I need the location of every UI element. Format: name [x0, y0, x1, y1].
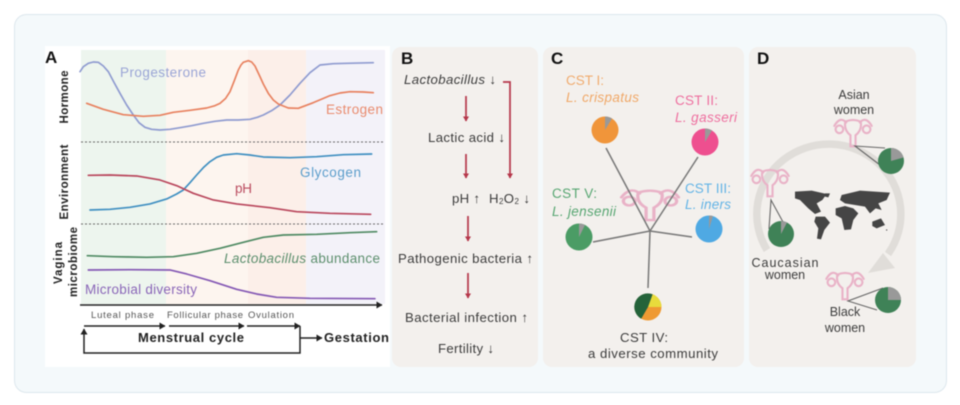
curve labels: Glycogen [300, 165, 361, 180]
microbiome curves [87, 232, 377, 299]
panel D: population differences [749, 47, 916, 367]
Caucasian women: women [764, 268, 805, 282]
chain text: 2 [514, 197, 519, 206]
CST III [685, 181, 731, 242]
Black women: Black [830, 305, 861, 319]
icon: uterus [621, 190, 679, 220]
chain text: 2 [499, 197, 504, 206]
CST IV: a diverse community [588, 346, 718, 361]
CST II [675, 93, 738, 156]
chain text: Lactic acid ↓ [428, 130, 505, 145]
CST V [552, 186, 617, 250]
CST I: L. crispatus [566, 90, 639, 105]
CST IV [588, 293, 718, 361]
phase labels: Luteal phase [91, 310, 154, 321]
CST III: CST III: [685, 181, 731, 196]
CST V: CST V: [552, 186, 597, 201]
curve labels: Microbial diversity [85, 282, 197, 297]
Black women: women [824, 321, 865, 335]
row label: Environment: Environment [59, 144, 71, 220]
hormone curves [80, 61, 373, 214]
curve labels: Lactobacillus abundance [224, 251, 380, 266]
row label: Hormone: Hormone [59, 70, 71, 124]
curve labels: Progesterone [120, 65, 206, 80]
panel C: community state types [543, 47, 744, 367]
curve labels: pH [235, 181, 252, 196]
Black women [824, 273, 901, 335]
CST I [566, 73, 639, 144]
gestation label: Gestation [324, 330, 389, 345]
panel letter D: D [757, 49, 769, 68]
CST IV: CST IV: [620, 330, 668, 345]
chain text: H [489, 191, 499, 206]
Asian women [833, 88, 904, 174]
phase bands [81, 50, 385, 304]
panel A: hormone, environment and microbiome curves [45, 46, 390, 367]
chain text: Bacterial infection ↑ [405, 310, 528, 325]
chain text: ↓ [519, 191, 530, 206]
glycogen and pH curves [88, 154, 372, 214]
red arrows [466, 82, 510, 298]
row label: Vagina microbiome: Vagina [53, 241, 65, 284]
chain text: Pathogenic bacteria ↑ [398, 251, 533, 266]
row label: Vagina microbiome [53, 227, 80, 297]
chain text: pH ↑ [452, 191, 480, 206]
panel letter B: B [401, 49, 413, 68]
chain text: Lactobacillus ↓ [404, 72, 496, 87]
chain text [398, 72, 533, 356]
Caucasian women: Caucasian [752, 256, 819, 270]
CST II: CST II: [675, 93, 718, 108]
curve labels [85, 65, 383, 297]
panel letter A: A [45, 48, 57, 67]
phase labels: Follicular phase [167, 310, 243, 321]
connector lines [593, 148, 698, 288]
panel B: causal chain [392, 47, 538, 367]
curve labels: Estrogen [326, 102, 383, 117]
time axis arrow [80, 304, 382, 306]
panel letter C: C [551, 49, 563, 68]
Asian women: women [833, 103, 874, 117]
Caucasian women [751, 170, 819, 282]
chain text: Fertility ↓ [438, 341, 494, 356]
phase labels [91, 310, 294, 321]
world map [795, 191, 890, 239]
menstrual cycle label: Menstrual cycle [138, 330, 244, 345]
Asian women: Asian [838, 88, 870, 102]
chain text: O [504, 191, 514, 206]
row label: Vagina microbiome: microbiome [68, 227, 80, 297]
phase labels: Ovulation [248, 310, 294, 321]
CST I: CST I: [566, 73, 604, 88]
menstrual cycle loop arrows [84, 326, 322, 353]
CST V: L. jensenii [552, 204, 617, 219]
CST III: L. iners [685, 197, 731, 212]
CST II: L. gasseri [675, 110, 738, 125]
circular arrow [757, 144, 901, 273]
